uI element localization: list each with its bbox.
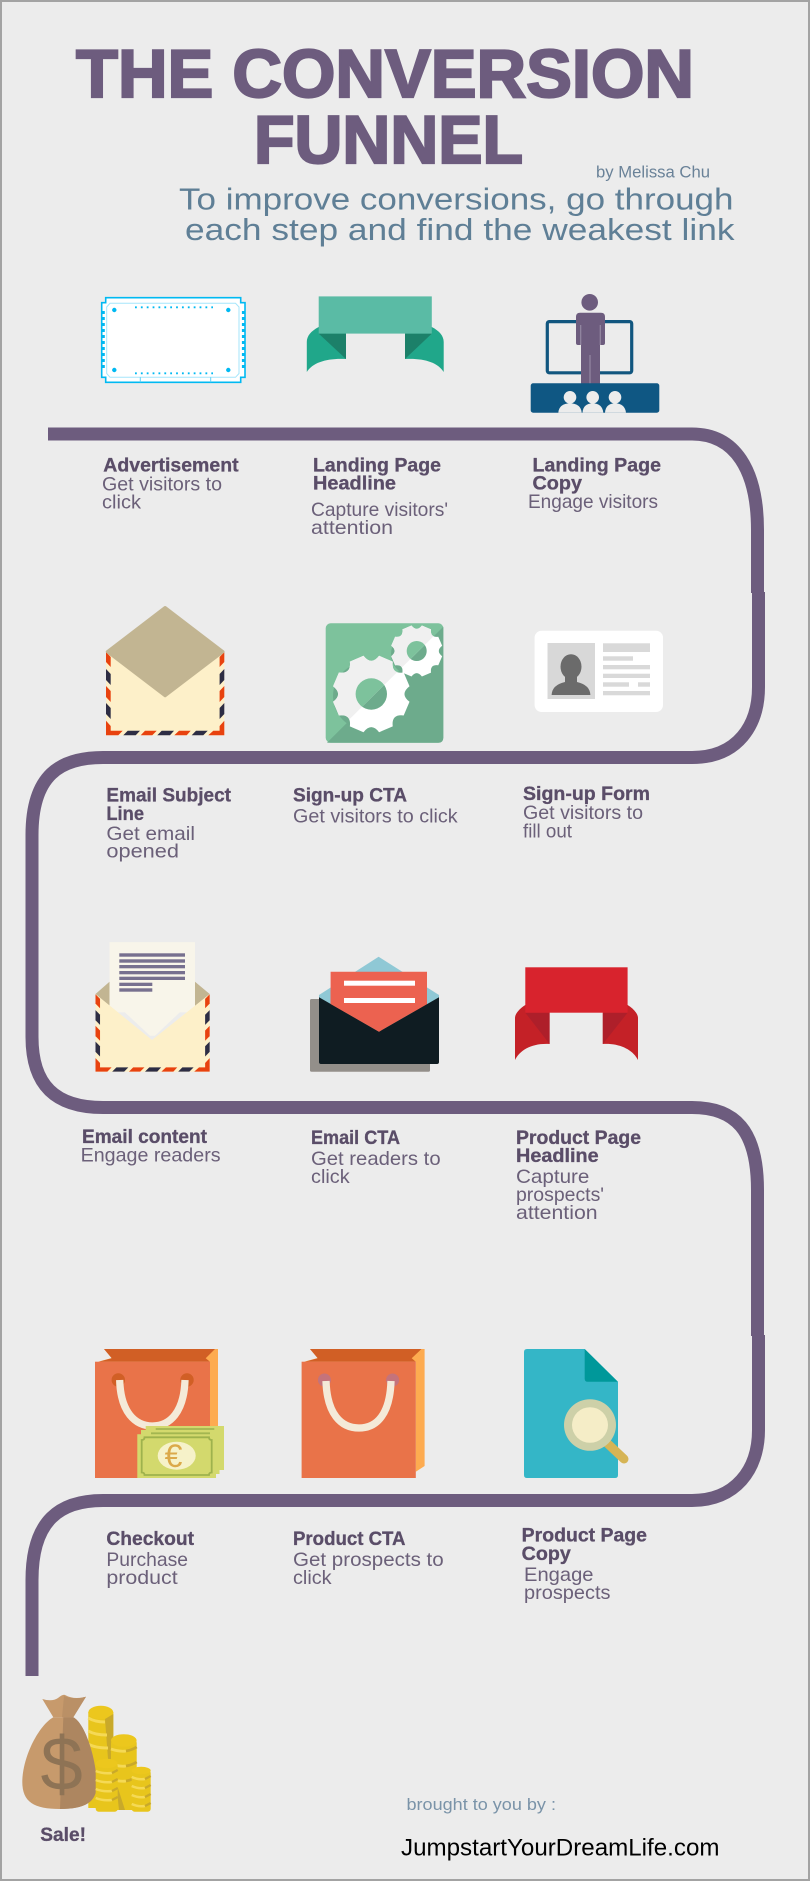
- subtitle: To improve conversions, go through: [179, 182, 734, 217]
- label: landing page copy: Landing Page: [532, 455, 661, 476]
- coin stack: front right: [132, 1767, 151, 1812]
- label: product page headline: [516, 1128, 641, 1224]
- label: checkout: Checkout: [106, 1529, 195, 1550]
- icon: ad ticket: [102, 298, 245, 382]
- label: email content: Engage readers: [81, 1145, 221, 1167]
- label: email CTA: Get readers to: [311, 1148, 441, 1170]
- label: landing page copy: Engage visitors: [528, 491, 658, 513]
- icon: red ribbon: [515, 967, 638, 1060]
- label: product CTA: [293, 1529, 444, 1589]
- icon: shopping bag with money: [95, 1349, 224, 1478]
- panel: sign-up CTA step: [293, 623, 458, 828]
- label: product page headline: prospects': [516, 1184, 604, 1206]
- label: landing page headline: [311, 455, 448, 539]
- label: product page headline: Product Page: [516, 1128, 641, 1149]
- subtitle: each step and find the weakest link: [185, 212, 735, 247]
- label: sign-up form: [523, 784, 650, 843]
- label: landing page headline: Headline: [313, 474, 396, 495]
- title: THE CONVERSION: [76, 36, 694, 112]
- label: product page headline: attention: [516, 1202, 598, 1224]
- panel: email content step: [81, 942, 221, 1167]
- label: email subject line: [106, 786, 232, 863]
- label: advertisement: Get visitors to: [102, 473, 222, 495]
- label: sign-up form: fill out: [523, 821, 573, 843]
- panel: advertisement step: [102, 298, 245, 514]
- label: checkout: Purchase: [106, 1549, 188, 1571]
- label: sign-up CTA: Get visitors to click: [293, 806, 458, 828]
- panel: sale step: [22, 1695, 151, 1846]
- panel: product page copy step: [522, 1349, 647, 1604]
- label: sign-up CTA: Sign-up CTA: [293, 786, 407, 807]
- label: landing page headline: attention: [311, 517, 393, 539]
- label: product CTA: Product CTA: [293, 1529, 406, 1550]
- panel: landing page headline step: [307, 296, 448, 539]
- website: JumpstartYourDreamLife.com: [401, 1835, 720, 1862]
- icon: shopping bag: [302, 1349, 425, 1478]
- author byline: by Melissa Chu: [596, 164, 710, 182]
- label: product page copy: prospects: [524, 1582, 611, 1604]
- label: landing page copy: [528, 455, 661, 513]
- coin stack: middle: [111, 1734, 137, 1810]
- label: email content: [81, 1127, 221, 1167]
- coin stack: tall back: [88, 1706, 113, 1808]
- icon: shopping bag with money: €: [165, 1438, 183, 1474]
- label: product page copy: Product Page: [522, 1526, 647, 1547]
- label: advertisement: click: [102, 492, 141, 514]
- subtitle: [179, 182, 735, 247]
- label: product CTA: Get prospects to: [293, 1549, 444, 1571]
- icon: closed-flap airmail envelope: [106, 608, 224, 735]
- label: advertisement: Advertisement: [103, 455, 239, 476]
- label: product CTA: click: [293, 1567, 332, 1589]
- credit line: brought to you by :: [406, 1795, 556, 1814]
- icon: teal ribbon: [307, 296, 444, 372]
- label: email content: Email content: [82, 1127, 208, 1148]
- label: sale: Sale!: [40, 1825, 86, 1846]
- coin stack: front left: [96, 1759, 118, 1812]
- label: landing page headline: Landing Page: [313, 455, 441, 476]
- icon: dark envelope with red card: [310, 957, 439, 1072]
- money bag: $: [41, 1722, 83, 1807]
- label: landing page headline: Capture visitors': [311, 499, 448, 521]
- label: email CTA: click: [311, 1166, 350, 1188]
- title: FUNNEL: [254, 102, 523, 178]
- label: product page copy: [522, 1526, 647, 1604]
- label: landing page copy: Copy: [532, 474, 582, 495]
- panel: email subject line step: [106, 608, 232, 863]
- label: product page headline: Capture: [516, 1166, 589, 1188]
- icon: money bag and coins: [22, 1695, 151, 1812]
- icon: presenter on stage: [531, 294, 659, 413]
- icon: envelope with letter: [96, 942, 210, 1072]
- label: sign-up form: Sign-up Form: [523, 784, 650, 805]
- label: sign-up CTA: [293, 786, 458, 828]
- label: email subject line: opened: [106, 841, 179, 863]
- label: email CTA: [311, 1128, 441, 1188]
- label: product page headline: Headline: [516, 1146, 599, 1167]
- label: email subject line: Email Subject: [106, 786, 232, 807]
- icon: ID form card: [535, 631, 663, 712]
- label: email subject line: Line: [106, 804, 144, 825]
- label: product page copy: Copy: [522, 1544, 571, 1565]
- funnel path: [32, 434, 758, 1676]
- panel: email CTA step: [310, 957, 441, 1188]
- label: product page copy: Engage: [524, 1564, 594, 1586]
- label: email subject line: Get email: [106, 823, 195, 845]
- label: checkout: product: [106, 1567, 178, 1589]
- icon: document with magnifier: [524, 1349, 624, 1478]
- panel: checkout step: [95, 1349, 224, 1589]
- label: checkout: [106, 1529, 195, 1589]
- label: advertisement: [102, 455, 239, 514]
- label: email CTA: Email CTA: [311, 1128, 400, 1149]
- panel: landing page copy step: [528, 294, 661, 513]
- panel: product page headline step: [515, 967, 641, 1224]
- icon: gears tile: [326, 623, 443, 743]
- panel: sign-up form step: [523, 631, 663, 843]
- label: sign-up form: Get visitors to: [523, 802, 643, 824]
- title: [76, 36, 694, 178]
- panel: product CTA step: [293, 1349, 444, 1589]
